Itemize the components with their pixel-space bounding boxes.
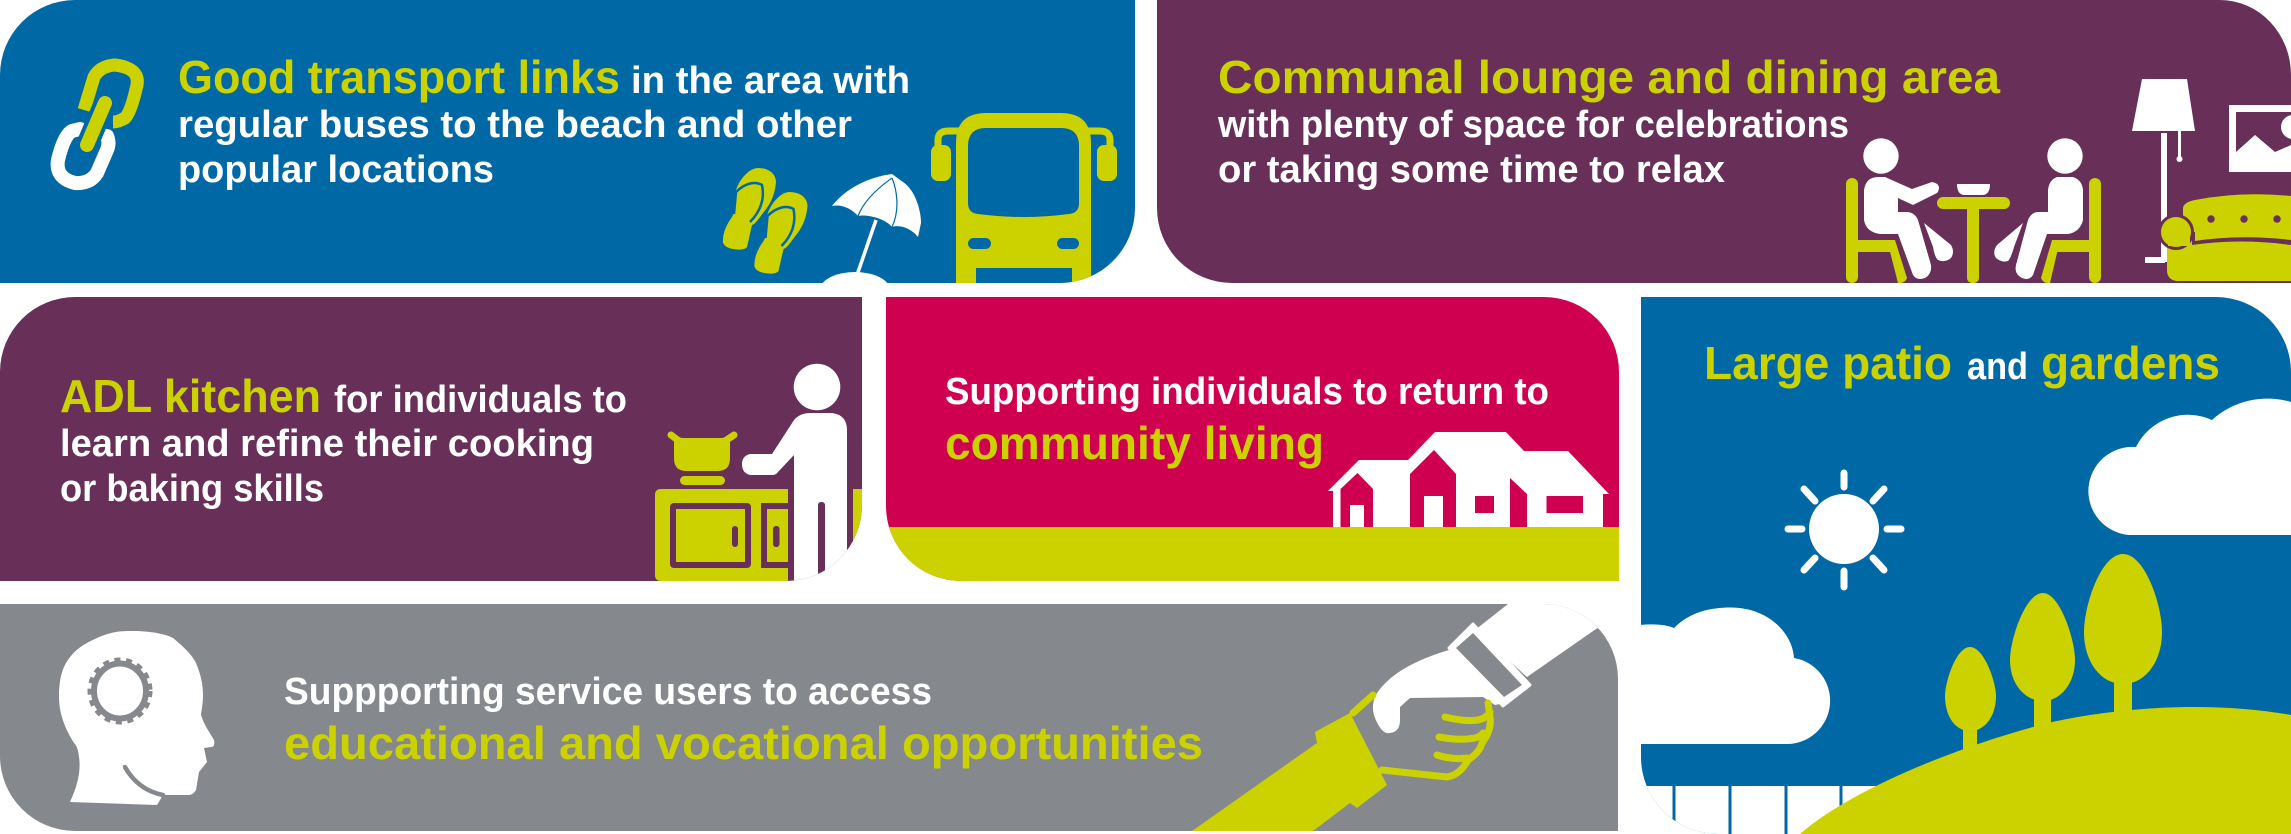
heading: good transport links: [178, 51, 910, 191]
icon: houses: [1328, 432, 1609, 527]
icon: floor lamp: [2132, 79, 2195, 263]
fence: [1646, 786, 1876, 834]
heading: community living: Supporting individuals to return to: [945, 371, 1549, 413]
panel: large patio and gardens: [1630, 297, 2291, 834]
icon: trees: [1945, 554, 2162, 753]
icon: beach umbrella: [822, 174, 921, 283]
icon: left chair: [1846, 178, 1907, 283]
heading: community living: community living: [945, 417, 1324, 469]
panel: educational and vocational opportunities: [0, 604, 1625, 831]
icon: bus: [931, 113, 1117, 290]
heading: ADL kitchen: [60, 370, 627, 510]
icon: right cloud: [2088, 399, 2291, 535]
heading: ADL kitchen: learn and refine their cooking: [60, 423, 594, 465]
heading: good transport links: regular buses to the beach and other: [178, 104, 852, 146]
heading: educational opportunities: Suppporting service users to access: [284, 671, 932, 713]
grass strip: [886, 527, 1619, 581]
heading: large patio and gardens: and: [1967, 346, 2028, 388]
icon: chain link: [58, 65, 137, 183]
heading: communal lounge: Communal lounge and dining area: [1218, 51, 2000, 103]
icon: sofa: [2160, 194, 2291, 281]
heading: good transport links: in the area with: [631, 60, 910, 102]
heading: communal lounge: with plenty of space for celebrations: [1217, 104, 1849, 146]
panel: good transport links: [0, 0, 1135, 308]
panel: ADL kitchen: [0, 297, 862, 590]
heading: large patio and gardens: [1707, 346, 2218, 388]
heading: community living: [945, 371, 1549, 469]
icon: person cooking: [742, 364, 847, 590]
icon: table and bowl: [1937, 184, 2010, 283]
panel: community living: [886, 297, 1619, 581]
icon: sun: [1788, 473, 1901, 587]
icon: left cloud: [1630, 608, 1830, 744]
icon: right chair: [2041, 178, 2101, 283]
hill: [1800, 707, 2291, 834]
icon: seated person left: [1863, 138, 1953, 279]
icon: white sleeve and hand: [1372, 604, 1598, 734]
icon: flip flops: [723, 168, 808, 274]
heading: communal lounge: or taking some time to relax: [1218, 149, 1725, 191]
icon: head with gear: [59, 631, 214, 805]
icon: kitchen counter: [655, 489, 862, 581]
icon: seated person right: [1994, 138, 2083, 279]
icon: lime sleeve and hand: [1192, 695, 1490, 831]
heading: large patio and gardens: gardens: [2041, 337, 2220, 389]
panel: communal lounge and dining area: [1157, 0, 2291, 283]
heading: ADL kitchen: for individuals to: [334, 379, 627, 421]
icon: wall picture: [2229, 105, 2291, 172]
icon: cooking pot: [671, 435, 734, 485]
heading: communal lounge: [1217, 51, 2000, 191]
heading: large patio and gardens: Large patio: [1704, 337, 1952, 389]
heading: educational opportunities: educational and vocational opportunities: [284, 717, 1203, 769]
heading: ADL kitchen: or baking skills: [60, 468, 324, 510]
heading: ADL kitchen: ADL kitchen: [60, 370, 321, 422]
heading: good transport links: Good transport links: [178, 51, 620, 103]
heading: good transport links: popular locations: [178, 149, 494, 191]
heading: educational opportunities: [284, 671, 1203, 769]
